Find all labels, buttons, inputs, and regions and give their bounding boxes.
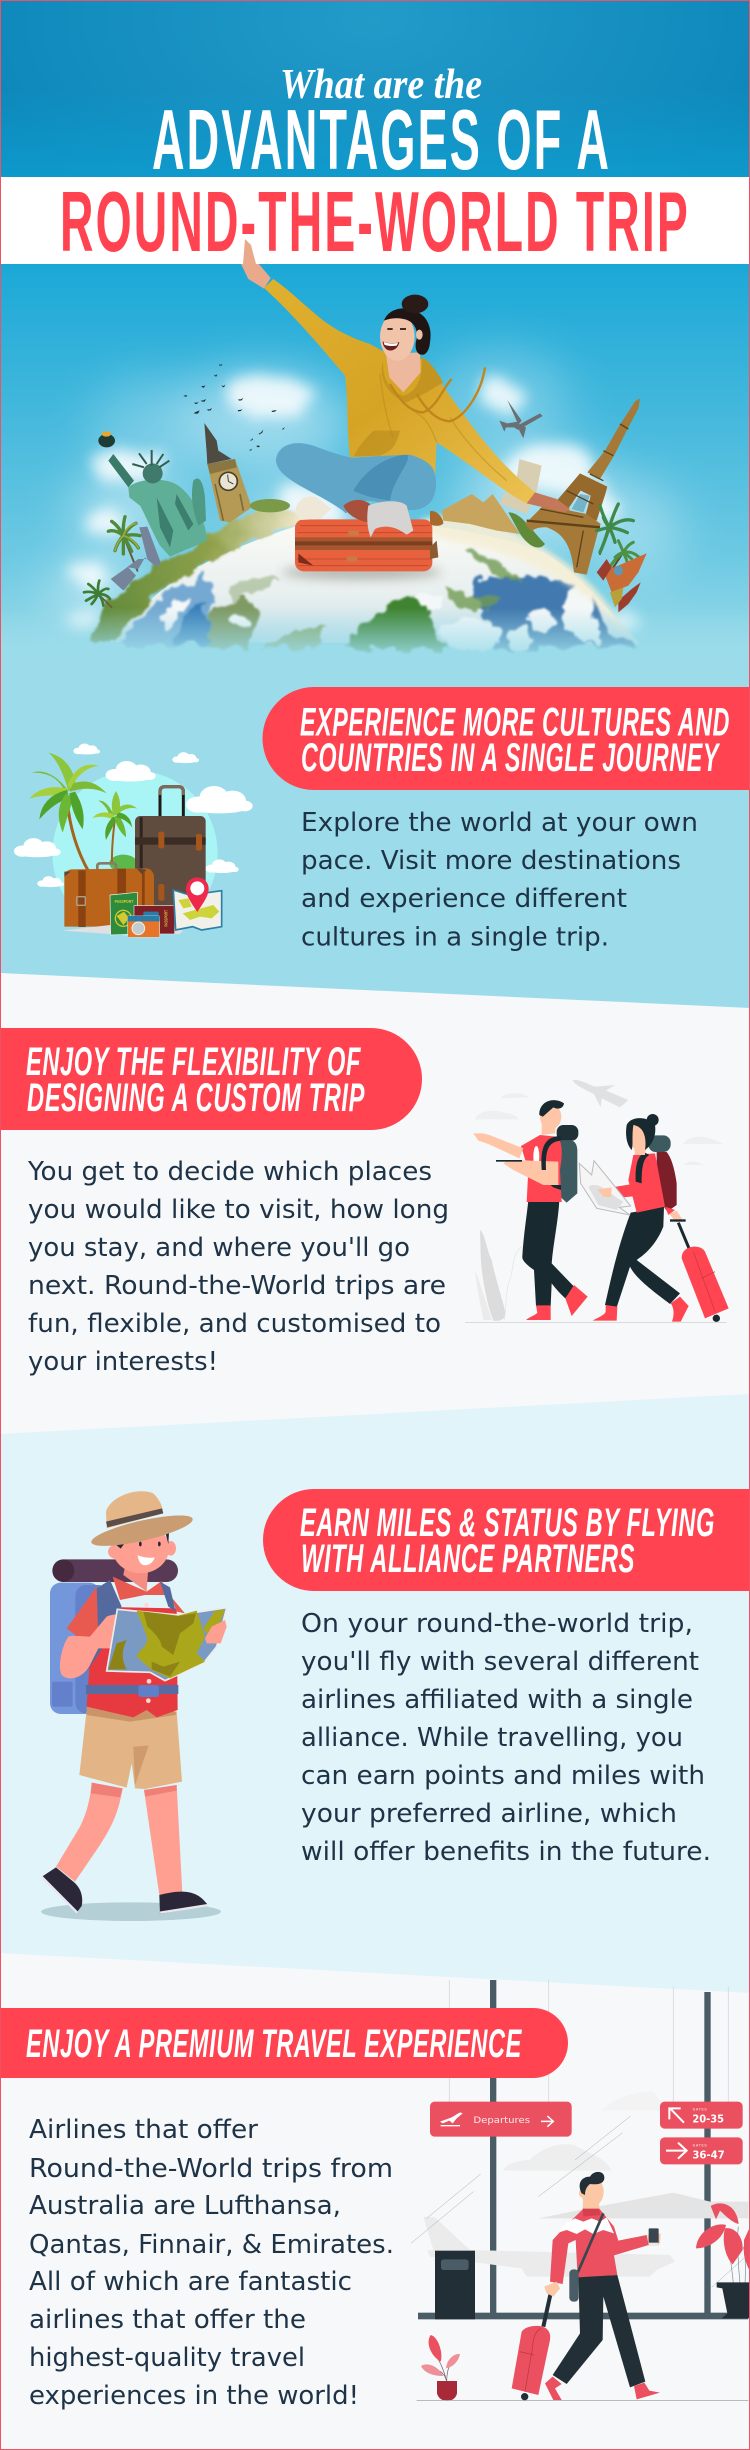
brown trolley case <box>135 787 206 907</box>
panel: flexibility <box>0 973 750 1440</box>
body text: you stay, and where you'll go <box>28 1233 410 1263</box>
body text: alliance. While travelling, you <box>301 1723 683 1753</box>
body text: can earn points and miles with <box>301 1761 705 1791</box>
departures sign <box>430 2102 572 2137</box>
bottom fade of hero <box>0 608 750 662</box>
saint basil cathedral <box>597 553 647 612</box>
body text: experiences in the world! <box>29 2381 359 2411</box>
neck <box>386 352 421 392</box>
bush <box>508 512 545 548</box>
fingers <box>205 1620 227 1643</box>
airplane <box>499 400 543 438</box>
body text: your interests! <box>28 1347 218 1377</box>
gates sign 20-35 <box>660 2102 743 2129</box>
bin <box>435 2251 475 2319</box>
hat <box>89 1491 195 1552</box>
palm trees left <box>84 517 140 607</box>
small plant <box>421 2335 460 2401</box>
body text: cultures in a single trip. <box>301 922 609 952</box>
body text: Airlines that offer <box>29 2115 258 2145</box>
raised hand <box>241 239 271 289</box>
vegetation rim of globe <box>95 509 300 645</box>
neck and head <box>108 1523 176 1592</box>
backpack <box>50 1559 178 1714</box>
bush <box>250 499 290 512</box>
plant right <box>696 2203 749 2318</box>
eiffel tower <box>525 398 640 575</box>
map <box>107 1608 227 1681</box>
face <box>380 313 415 361</box>
body text: On your round-the-world trip, <box>301 1609 693 1639</box>
gates sign 20-35: 20-35 <box>692 2114 724 2126</box>
map with pin <box>173 877 222 930</box>
legs <box>56 1783 182 1895</box>
big ben <box>204 423 252 522</box>
illustration: luggage and palms <box>14 743 253 937</box>
gates sign 36-47: 36-47 <box>692 2149 725 2161</box>
body text: Australia are Lufthansa, <box>29 2191 341 2221</box>
body text: you would like to visit, how long <box>28 1195 449 1225</box>
birds <box>183 364 285 451</box>
statue of liberty <box>98 431 207 557</box>
pisa tower <box>500 459 542 514</box>
right hand <box>527 492 570 512</box>
palms right <box>597 504 638 572</box>
shoes <box>42 1867 208 1914</box>
body text <box>301 1609 711 1867</box>
body text: You get to decide which places <box>27 1157 432 1187</box>
body text: highest-quality travel <box>29 2343 305 2373</box>
header band <box>0 0 750 188</box>
drawstrings <box>390 367 485 421</box>
title band: white strip <box>0 175 750 270</box>
pyramids <box>442 494 520 534</box>
departures sign: Departures <box>473 2116 530 2126</box>
background ghosts <box>465 1080 727 1323</box>
hair <box>384 308 431 355</box>
hood <box>382 357 443 402</box>
body text: All of which are fantastic <box>29 2267 352 2297</box>
body text <box>301 808 698 952</box>
panel: premium travel <box>0 1953 750 2450</box>
camera <box>128 912 160 937</box>
heading pill: DESIGNING A CUSTOM TRIP <box>27 1076 365 1120</box>
body text: Round-the-World trips from <box>29 2154 393 2184</box>
body text: airlines that offer the <box>29 2305 306 2335</box>
palm trees <box>29 753 137 872</box>
right sneaker <box>367 501 413 537</box>
ankle <box>343 500 370 522</box>
traveller <box>512 2172 661 2400</box>
illustration: hiker reading map <box>41 1491 227 1921</box>
mouth <box>383 341 399 351</box>
body text: Qantas, Finnair, & Emirates. <box>29 2230 394 2260</box>
body text: your preferred airline, which <box>301 1799 677 1829</box>
hero illustration <box>0 239 750 662</box>
woman <box>241 239 570 537</box>
body text: you'll fly with several different <box>301 1647 699 1677</box>
background ghosts <box>411 2091 749 2287</box>
body text <box>29 2115 394 2411</box>
hero clouds <box>50 350 680 620</box>
heading pill <box>263 1489 750 1591</box>
gates sign 36-47: GATES <box>693 2143 707 2147</box>
gates sign 20-35: GATES <box>693 2108 707 2112</box>
body text <box>27 1157 449 1377</box>
left landmarks group <box>84 364 290 607</box>
illustration: airport traveller <box>411 1980 749 2401</box>
heading pill <box>262 687 750 790</box>
shorts <box>79 1707 182 1789</box>
body text: airlines affiliated with a single <box>301 1685 693 1715</box>
body text: Explore the world at your own <box>301 808 698 838</box>
title: script line: What are the <box>280 62 482 108</box>
jeans <box>276 443 436 513</box>
skyline buildings <box>111 527 161 591</box>
arm <box>60 1614 129 1678</box>
man <box>473 1100 588 1320</box>
illustration: couple with backpacks <box>465 1080 729 1323</box>
body text: next. Round-the-World trips are <box>28 1271 446 1301</box>
suitcase on globe <box>282 511 443 580</box>
left sneaker <box>295 496 332 520</box>
heading pill <box>0 1028 422 1130</box>
cloud dust along right rim <box>420 516 630 640</box>
right landmarks group <box>442 398 647 612</box>
eyes <box>387 326 406 331</box>
body text: will offer benefits in the future. <box>301 1837 711 1867</box>
body text: fun, flexible, and customised to <box>28 1309 441 1339</box>
shirt <box>67 1577 185 1717</box>
gates sign 36-47 <box>660 2137 743 2164</box>
body text: pace. Visit more destinations <box>301 846 681 876</box>
body text: and experience different <box>301 884 627 914</box>
heading pill <box>0 2008 568 2078</box>
window frame <box>449 1980 728 2315</box>
orange suitcase <box>62 863 183 934</box>
panel: cultures <box>0 660 750 1010</box>
passports: PASSPORT <box>163 910 168 927</box>
heading pill: ENJOY THE FLEXIBILITY OF <box>26 1040 361 1084</box>
raised fingertips over band <box>243 239 256 264</box>
woman <box>579 1114 729 1322</box>
sweater <box>264 279 535 503</box>
passports: PASSPORT <box>115 899 133 905</box>
passports <box>110 892 175 935</box>
globe <box>110 520 640 651</box>
panel: miles and status <box>0 1394 750 1998</box>
